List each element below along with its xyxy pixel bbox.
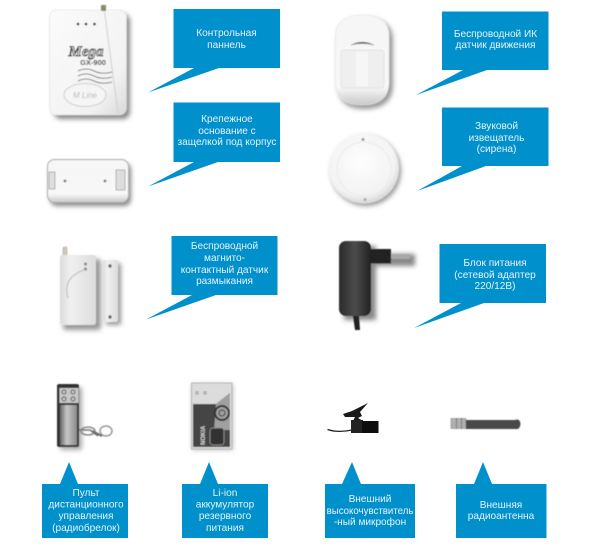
callout: remote key fob: Пульт — [72, 488, 100, 499]
callout: control panel: Контрольная — [196, 28, 257, 39]
callout: motion sensor — [416, 12, 548, 95]
callout: battery: питания — [206, 523, 244, 534]
icon: power adapter — [339, 241, 415, 330]
callout: siren: Звуковой — [475, 121, 518, 132]
icon: control panel: GX-900 — [80, 58, 106, 67]
callout: remote key fob: дистанционного — [48, 500, 124, 510]
callout: external microphone: Внешний — [349, 494, 391, 505]
icon: control panel — [50, 5, 130, 119]
icon: control panel: M Line — [73, 91, 98, 100]
callout: remote key fob: (радиобрелок) — [52, 522, 120, 534]
callout: power adapter — [414, 244, 546, 328]
callout: siren — [417, 108, 548, 191]
callout: magnetic contact sensor — [146, 236, 278, 320]
callout: remote key fob — [42, 462, 128, 538]
icon: radio antenna — [451, 418, 520, 429]
icon: battery — [192, 383, 233, 450]
callout: mounting base: защелкой под корпус — [178, 137, 276, 148]
callout: external microphone: -ный микрофон — [334, 516, 406, 528]
callout: motion sensor: датчик движения — [456, 40, 535, 51]
callout: siren: извещатель — [469, 133, 524, 144]
icon: siren — [329, 134, 401, 206]
callout: battery: резервного — [199, 511, 252, 522]
callout: power adapter: Блок питания — [463, 258, 527, 269]
callout: power adapter: 220/12В) — [475, 281, 515, 292]
icon: battery: NOKIA — [201, 425, 207, 445]
callout: radio antenna: радиоантенна — [468, 511, 535, 522]
callout: battery: Li-ion — [213, 488, 237, 499]
icon: external microphone — [328, 403, 378, 433]
callout: motion sensor: Беспроводной ИК — [454, 29, 537, 40]
callout: mounting base — [148, 102, 280, 186]
callout: magnetic contact sensor: контактный датчик — [181, 265, 269, 276]
callout: external microphone: высокочувствитель — [327, 506, 413, 517]
callout: magnetic contact sensor: магнито- — [204, 253, 245, 264]
callout: siren: (сирена) — [477, 144, 516, 155]
callout: battery — [182, 462, 268, 538]
callout: magnetic contact sensor: размыкания — [196, 276, 253, 287]
callout: magnetic contact sensor: Беспроводной — [191, 241, 258, 252]
callout: radio antenna: Внешняя — [480, 500, 522, 511]
icon: mounting base — [48, 160, 131, 206]
icon: control panel: Mega — [68, 44, 104, 60]
icon: remote key fob — [57, 384, 112, 450]
callout: control panel — [148, 9, 280, 92]
callout: power adapter: (сетевой адаптер — [454, 270, 536, 281]
icon: motion sensor — [336, 15, 393, 109]
callout: external microphone — [325, 462, 415, 538]
callout: control panel: паннель — [207, 40, 246, 51]
callout: remote key fob: управления — [58, 511, 114, 522]
callout: battery: аккумулятор — [196, 500, 255, 510]
callout: radio antenna — [456, 462, 546, 538]
callout: mounting base: основание с — [198, 126, 256, 137]
callout: mounting base: Крепежное — [201, 114, 253, 125]
icon: magnetic contact sensor — [60, 247, 121, 330]
